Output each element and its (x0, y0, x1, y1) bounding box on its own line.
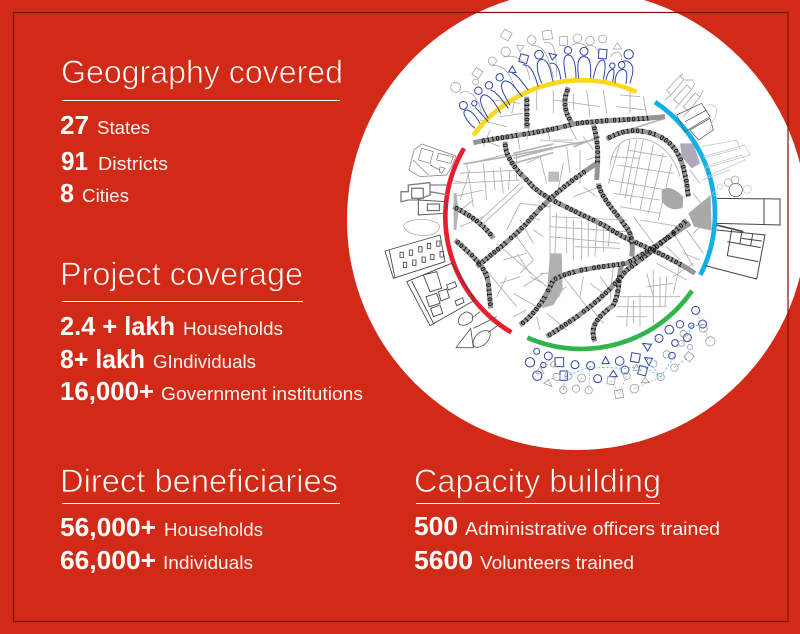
stat: households: Households (183, 319, 283, 339)
roads with binary code labels: 01100011 01101001 01 0001010 01100111 (482, 116, 650, 144)
roads with binary code labels: 0110010 (562, 88, 572, 121)
roads with binary code labels: 01100011 01101001 01 0101010010 (477, 170, 586, 267)
heading: geography covered: Geography covered (61, 54, 343, 90)
trees and tent (456, 312, 498, 348)
heading: direct beneficiaries: Direct beneficiaries (60, 463, 338, 499)
illustration: city map in circle (384, 28, 780, 400)
people group: blue outlines in front (459, 47, 633, 128)
network: connecting lines (537, 310, 710, 394)
stat: administrative officers (414, 511, 720, 541)
stat: cities: 8 (60, 178, 74, 208)
roads with binary code labels: 01100011 1010101 (590, 274, 622, 340)
panel: geography covered (60, 54, 343, 208)
roads with binary code labels: 01100011 01101001 01 0001010 0110011 1010 (520, 232, 676, 326)
railway corridor (463, 118, 665, 164)
stat: cities (60, 178, 129, 208)
arc: green (527, 291, 692, 349)
panel: direct beneficiaries (60, 463, 340, 575)
stat: individuals: 66,000+ (60, 545, 156, 575)
arc: red (445, 148, 511, 332)
buildings: left lower (385, 235, 715, 399)
stat: government institutions (60, 376, 363, 406)
stat: cities: Cities (82, 186, 129, 206)
stat: states (60, 110, 150, 140)
heading rule (62, 503, 340, 504)
street network (450, 90, 707, 330)
buildings and trees: right upper (665, 74, 751, 197)
stat: households: Households (164, 520, 263, 540)
roads with binary code labels (452, 86, 696, 343)
stat: individuals: 8+ lakh (60, 344, 145, 374)
roads with binary code labels: 01100011 0110101 01 0001010 01100111 00100000101 (502, 144, 682, 268)
heading rule (416, 503, 660, 504)
stat: districts (61, 146, 168, 176)
stat: government institutions: Government institutions (161, 384, 363, 404)
roads with binary code labels: 011000 (524, 98, 530, 126)
heading rule (62, 100, 340, 101)
building block (385, 235, 475, 326)
network: grey nodes (536, 324, 715, 399)
panel: capacity building (414, 463, 720, 575)
roads with binary code labels: 01101001 01 0001010 01100111 (608, 128, 691, 197)
stat: districts: 91 (61, 146, 88, 176)
stat: individuals: GIndividuals (153, 352, 256, 372)
stat: states: 27 (60, 110, 89, 140)
water bodies and parks (455, 143, 712, 308)
stat: individuals (60, 545, 253, 575)
heading: capacity building: Capacity building (414, 463, 661, 499)
heading: project coverage: Project coverage (60, 256, 303, 292)
people group: grey outlines behind (451, 29, 622, 115)
network: blue nodes (525, 306, 707, 383)
roads with binary code labels: 011000111010 (454, 206, 493, 236)
arc: blue (655, 102, 715, 275)
roads with binary code labels: 01100011 01101001 0010101 01100011 01010 (548, 220, 688, 337)
roads with binary code labels: 01100011 (592, 126, 600, 164)
white circle (347, 0, 800, 450)
buildings: left upper (401, 144, 456, 235)
stat: individuals: Individuals (163, 553, 253, 573)
heading rule (62, 301, 303, 302)
arc: yellow (473, 80, 637, 135)
panel: project coverage (60, 256, 363, 406)
stat: administrative officers: 500 (414, 511, 458, 541)
roads with binary code labels: 00000100 111001 (596, 184, 634, 245)
stat: states: States (97, 118, 150, 138)
stat: administrative officers: Administrative officers trained (465, 519, 720, 539)
stat: volunteers (414, 545, 634, 575)
stat: households (60, 311, 283, 341)
stat: households (60, 512, 263, 542)
stat: government institutions: 16,000+ (60, 376, 154, 406)
stat: households: 56,000+ (60, 512, 156, 542)
stat: households: 2.4 + lakh (60, 311, 175, 341)
stat: volunteers: Volunteers trained (480, 553, 634, 573)
stat: individuals (60, 344, 256, 374)
stat: districts: Districts (98, 154, 168, 174)
buildings: right lower (705, 198, 780, 279)
stat: volunteers: 5600 (414, 545, 473, 575)
roads with binary code labels: 0011010 011 0110010 (456, 240, 493, 306)
